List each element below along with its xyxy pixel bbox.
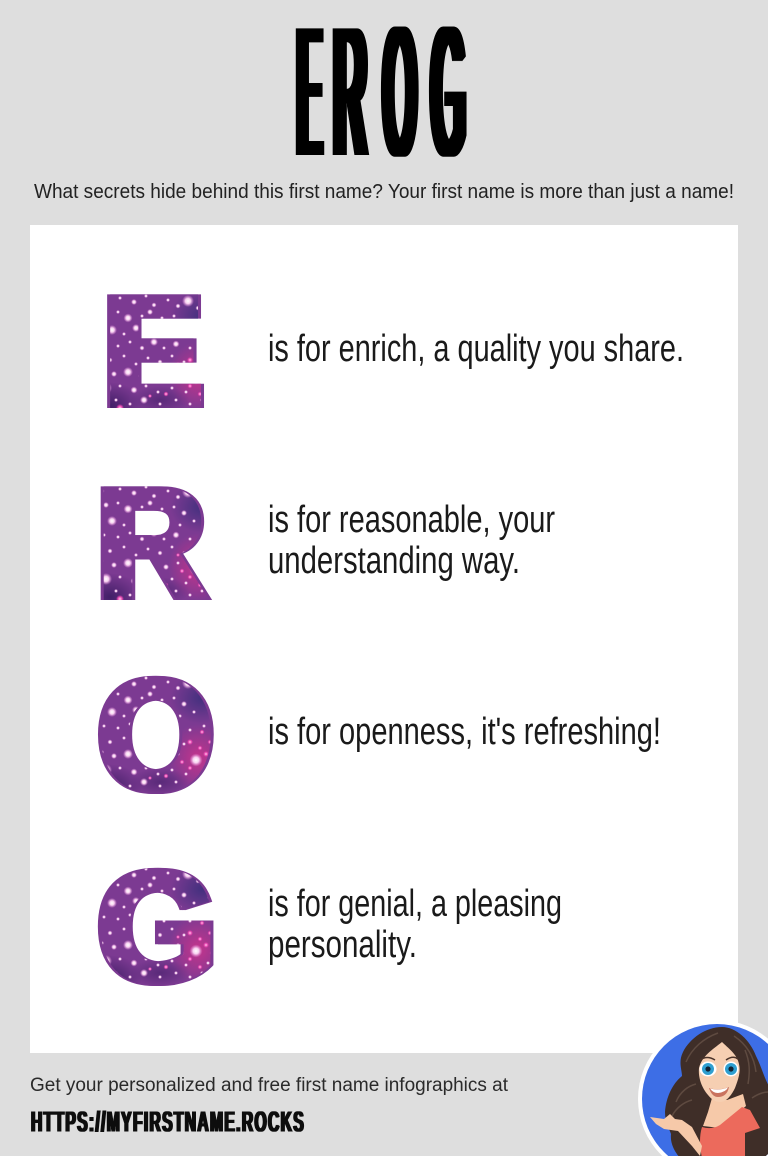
hair highlights [672, 1033, 768, 1116]
letter R: R [97, 456, 206, 630]
letter E: E [104, 264, 204, 438]
text: G meaning: personality. [268, 924, 417, 966]
neck [703, 1094, 746, 1128]
letter G row [98, 840, 562, 1015]
face [699, 1042, 740, 1102]
letter O: O [98, 648, 214, 823]
text: R meaning: is for reasonable, your [268, 499, 555, 541]
shirt [700, 1107, 760, 1156]
footer url: HTTPS://MYFIRSTNAME.ROCKS [31, 1105, 304, 1138]
subtitle: What secrets hide behind this first name? Your first name is more than just a name! [34, 181, 734, 203]
text: R meaning: understanding way. [268, 540, 520, 582]
letter G: G [98, 840, 216, 1015]
footer text: Get your personalized and free first name infographics at [30, 1075, 509, 1096]
brows [700, 1057, 738, 1060]
text: G meaning: is for genial, a pleasing [268, 883, 562, 925]
eyes [700, 1062, 716, 1076]
letter O row [98, 648, 661, 823]
text: O meaning: is for openness, it's refreshing! [268, 711, 661, 753]
letter R row [97, 456, 555, 630]
letter E row [104, 264, 684, 438]
avatar [638, 1020, 768, 1156]
arm and hand [650, 1114, 702, 1156]
mouth [709, 1087, 729, 1097]
hair [665, 1027, 768, 1156]
panel: name letters [30, 225, 738, 1053]
